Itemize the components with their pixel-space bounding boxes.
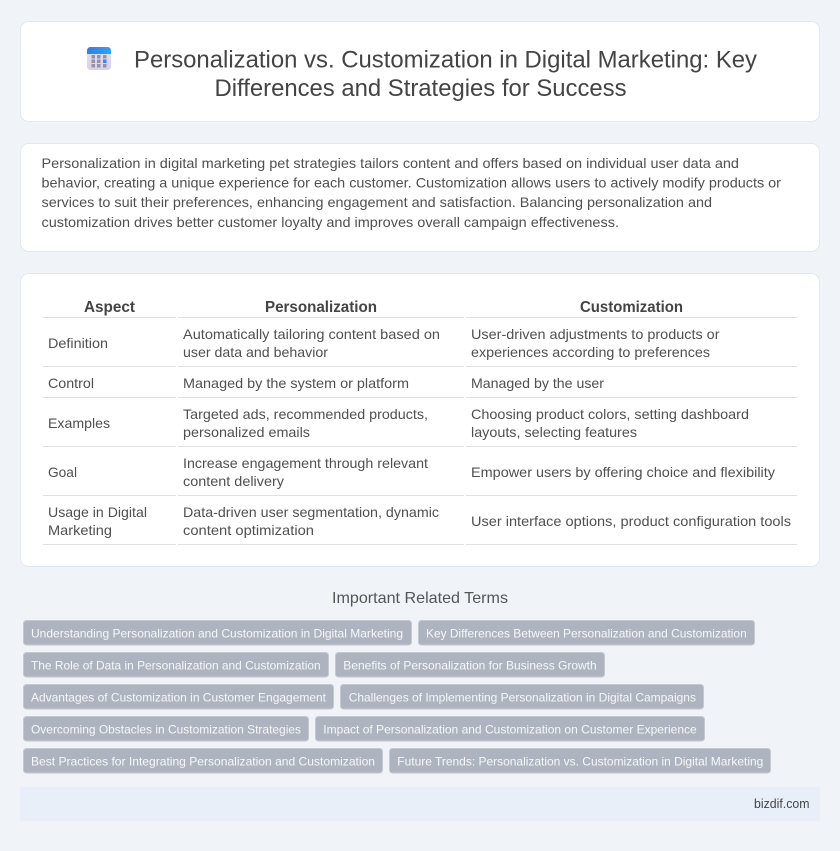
table header row: Aspect [84, 299, 136, 316]
text block: introduction paragraph: customization drives better customer loyalty and improves overall campaign effectiveness. [42, 214, 619, 230]
table row: definition: Automatically tailoring content based on [183, 326, 440, 342]
table row: examples: Examples [48, 415, 110, 431]
tag row 4 [24, 716, 704, 741]
table row: definition: User-driven adjustments to products or [471, 326, 720, 342]
tag row 2: The Role of Data in Personalization and Customization [31, 658, 321, 672]
table row: control: Managed by the user [471, 375, 604, 391]
table row: examples: personalized emails [183, 424, 310, 440]
table header row: Personalization [265, 299, 377, 316]
tag row 5: Best Practices for Integrating Personalization and Customization [31, 754, 375, 768]
table row: goal: Goal [48, 464, 77, 480]
table row: examples: layouts, selecting features [471, 424, 637, 440]
text block: introduction paragraph: Personalization in digital marketing pet strategies tailors content and offers based on individual user data and [42, 155, 739, 171]
table row: definition: user data and behavior [183, 344, 328, 360]
table row: examples [48, 406, 749, 440]
title [134, 46, 757, 102]
table row: usage in digital marketing: Data-driven user segmentation, dynamic [183, 504, 439, 520]
tag row 3: Challenges of Implementing Personalization in Digital Campaigns [349, 690, 696, 704]
panel: header [20, 22, 820, 122]
table row: goal [48, 455, 775, 489]
table row: usage in digital marketing [48, 504, 791, 538]
footer [20, 787, 820, 821]
tag row 4: Impact of Personalization and Customization on Customer Experience [323, 722, 697, 736]
table row: usage in digital marketing: Marketing [48, 522, 112, 538]
table row: definition [48, 326, 720, 360]
title: Differences and Strategies for Success [214, 75, 626, 102]
table header row: Customization [580, 299, 683, 316]
table row: examples: Targeted ads, recommended products, [183, 406, 428, 422]
table row: usage in digital marketing: User interface options, product configuration tools [471, 513, 791, 529]
tag row 1: Key Differences Between Personalization and Customization [426, 626, 747, 640]
panel: introduction [20, 144, 820, 252]
tag row 2 [24, 652, 604, 677]
tag row 3 [24, 684, 704, 709]
title: Personalization vs. Customization in Digital Marketing: Key [134, 46, 757, 74]
table row: usage in digital marketing: Usage in Digital [48, 504, 147, 520]
text block: introduction paragraph [42, 155, 781, 230]
footer credit: bizdif.com [754, 796, 810, 811]
table row: goal: content delivery [183, 473, 284, 489]
tag row 1: Understanding Personalization and Customization in Digital Marketing [31, 626, 403, 640]
tag row 4: Overcoming Obstacles in Customization Strategies [31, 722, 301, 736]
tag row 1 [24, 620, 754, 645]
table row: control: Control [48, 375, 94, 391]
tag row 5 [24, 748, 770, 773]
table row: goal: Empower users by offering choice and flexibility [471, 464, 775, 480]
table header row [84, 299, 683, 316]
table row: usage in digital marketing: content optimization [183, 522, 314, 538]
tag row 5: Future Trends: Personalization vs. Customization in Digital Marketing [397, 754, 763, 768]
table row: definition: Definition [48, 335, 108, 351]
table row: control [48, 375, 604, 391]
tag list: related terms [24, 620, 770, 773]
tag row 2: Benefits of Personalization for Business Growth [343, 658, 597, 672]
text block: introduction paragraph: behavior, creating a unique experience for each customer. Customization allows users to actively modify products or [42, 175, 781, 191]
tag row 3: Advantages of Customization in Customer Engagement [31, 690, 327, 704]
heading: important related terms: Important Related Terms [332, 590, 508, 607]
table row: goal: Increase engagement through relevant [183, 455, 428, 471]
text block: introduction paragraph: services to suit their preferences, enhancing engagement and satisfaction. Balancing personalization and [42, 194, 712, 210]
table row: examples: Choosing product colors, setting dashboard [471, 406, 749, 422]
panel: comparison table [20, 274, 820, 566]
table row: control: Managed by the system or platform [183, 375, 409, 391]
table row: definition: experiences according to preferences [471, 344, 710, 360]
icon: calendar [87, 47, 111, 70]
